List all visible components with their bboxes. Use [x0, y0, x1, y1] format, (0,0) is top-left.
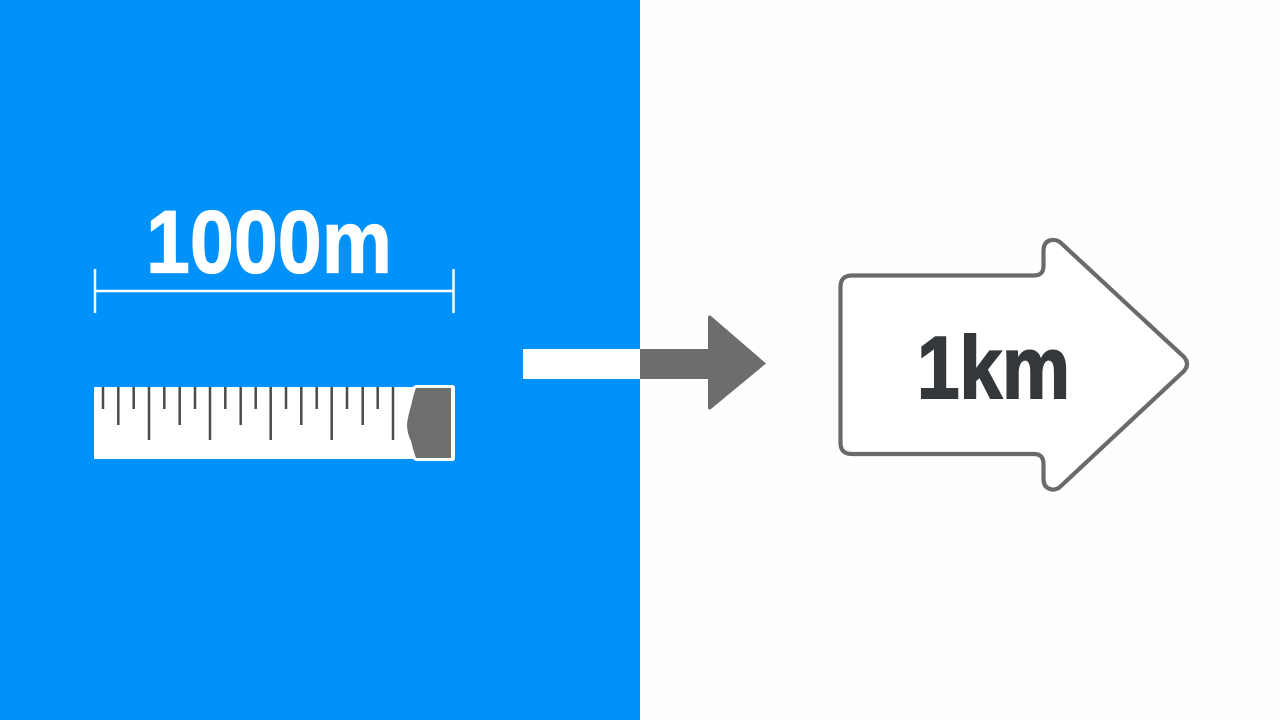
label: 1km: 1km [917, 318, 1070, 417]
tape case [404, 385, 455, 461]
icon: outlined arrow [840, 240, 1187, 490]
arrow white shaft [523, 349, 640, 379]
dimension line [95, 269, 454, 313]
heading: 1000m: 1000m [146, 192, 392, 292]
tape tick marks [103, 387, 393, 440]
tape body [94, 387, 416, 459]
arrow grey head [640, 315, 766, 410]
arrow: conversion arrow [523, 315, 766, 410]
panel: blue left background [0, 0, 640, 720]
icon: tape measure [94, 385, 455, 461]
panel: white right background [640, 0, 1280, 720]
